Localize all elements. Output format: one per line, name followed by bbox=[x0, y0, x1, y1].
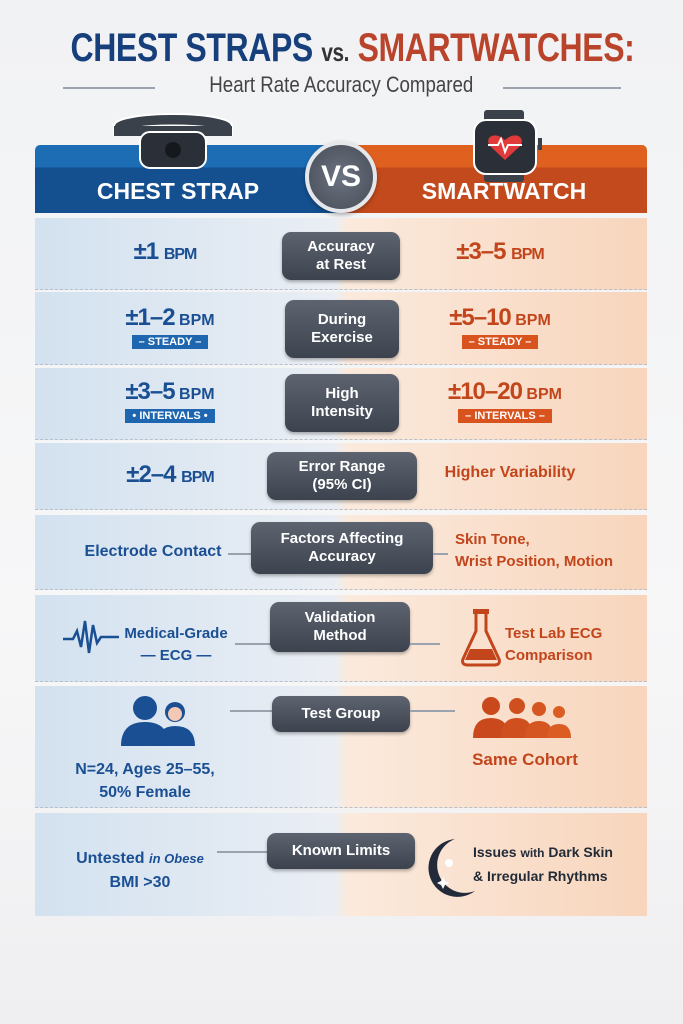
pill: During bbox=[318, 311, 366, 328]
row: test group: 50% Female bbox=[99, 784, 191, 801]
row: high intensity: ±3–5 BPM bbox=[125, 378, 215, 405]
header: smartwatch: SMARTWATCH bbox=[422, 178, 586, 204]
row: accuracy at rest bbox=[35, 218, 647, 290]
pill: Test Group bbox=[302, 705, 380, 722]
pill bbox=[282, 232, 400, 280]
header: smartwatch bbox=[341, 145, 647, 213]
icon: moon bbox=[428, 839, 475, 897]
pill: Exercise bbox=[311, 329, 373, 346]
row: error range: Higher Variability bbox=[445, 464, 575, 481]
icon: people orange bbox=[473, 697, 571, 738]
row: during exercise bbox=[35, 292, 647, 365]
pill: Error Range bbox=[299, 458, 385, 475]
pill bbox=[267, 833, 415, 869]
pill bbox=[272, 696, 410, 732]
pill: Method bbox=[313, 627, 367, 644]
row: validation bbox=[35, 595, 647, 682]
pill bbox=[285, 300, 399, 358]
pill: Accuracy bbox=[307, 238, 375, 255]
row: accuracy at rest: ±1 BPM bbox=[134, 238, 196, 265]
icon: ECG wave bbox=[63, 620, 119, 654]
row: known limits: & Irregular Rhythms bbox=[473, 868, 608, 884]
row: factors: Skin Tone, bbox=[455, 531, 530, 548]
row: validation: Test Lab ECG bbox=[505, 625, 602, 642]
row: known limits: BMI >30 bbox=[110, 874, 170, 891]
row: error range: ±2–4 BPM bbox=[126, 461, 214, 488]
row: test group bbox=[35, 686, 647, 808]
row: known limits: Untested in Obese bbox=[76, 850, 204, 867]
pill: at Rest bbox=[316, 256, 366, 273]
row: during exercise: – STEADY – bbox=[469, 336, 531, 348]
row: during exercise: – STEADY – bbox=[139, 336, 201, 348]
pill: High bbox=[325, 385, 359, 402]
row: high intensity bbox=[35, 368, 647, 440]
pill bbox=[285, 374, 399, 432]
row: error range bbox=[35, 443, 647, 510]
title: CHEST STRAPS vs. SMARTWATCHES: bbox=[70, 26, 634, 70]
row: factors bbox=[35, 515, 647, 590]
VS badge bbox=[305, 141, 377, 213]
row: high intensity: ±10–20 BPM bbox=[448, 378, 562, 405]
pill: Validation bbox=[305, 609, 375, 626]
row: known limits bbox=[35, 813, 647, 916]
header: chest strap: CHEST STRAP bbox=[97, 178, 259, 204]
icon: flask bbox=[461, 609, 501, 666]
pill: Factors Affecting bbox=[281, 530, 403, 547]
row: validation: — ECG — bbox=[141, 647, 211, 664]
pill bbox=[270, 602, 410, 652]
row: accuracy at rest: ±3–5 BPM bbox=[456, 238, 544, 265]
row: test group: N=24, Ages 25–55, bbox=[75, 761, 215, 778]
pill bbox=[267, 452, 417, 500]
pill bbox=[251, 522, 433, 574]
row: known limits: Issues with Dark Skin bbox=[473, 844, 613, 860]
row: high intensity: • INTERVALS • bbox=[132, 410, 208, 422]
row: factors: Wrist Position, Motion bbox=[455, 553, 613, 570]
row: validation: Comparison bbox=[505, 647, 593, 664]
row: high intensity: – INTERVALS – bbox=[465, 410, 545, 422]
row: test group: Same Cohort bbox=[472, 750, 578, 769]
VS badge: VS bbox=[321, 160, 361, 193]
row: during exercise: ±5–10 BPM bbox=[449, 304, 551, 331]
pill: (95% CI) bbox=[312, 476, 372, 493]
row: factors: Electrode Contact bbox=[85, 543, 221, 560]
subtitle: Heart Rate Accuracy Compared bbox=[209, 72, 473, 97]
row: during exercise: ±1–2 BPM bbox=[125, 304, 215, 331]
row: validation: Medical-Grade bbox=[124, 625, 228, 642]
pill: Known Limits bbox=[292, 842, 390, 859]
icon: chest strap bbox=[113, 113, 233, 169]
pill: Accuracy bbox=[308, 548, 376, 565]
pill: Intensity bbox=[311, 403, 373, 420]
header: chest strap bbox=[35, 145, 341, 213]
icon: smartwatch bbox=[473, 110, 542, 182]
icon: people blue bbox=[121, 696, 195, 746]
